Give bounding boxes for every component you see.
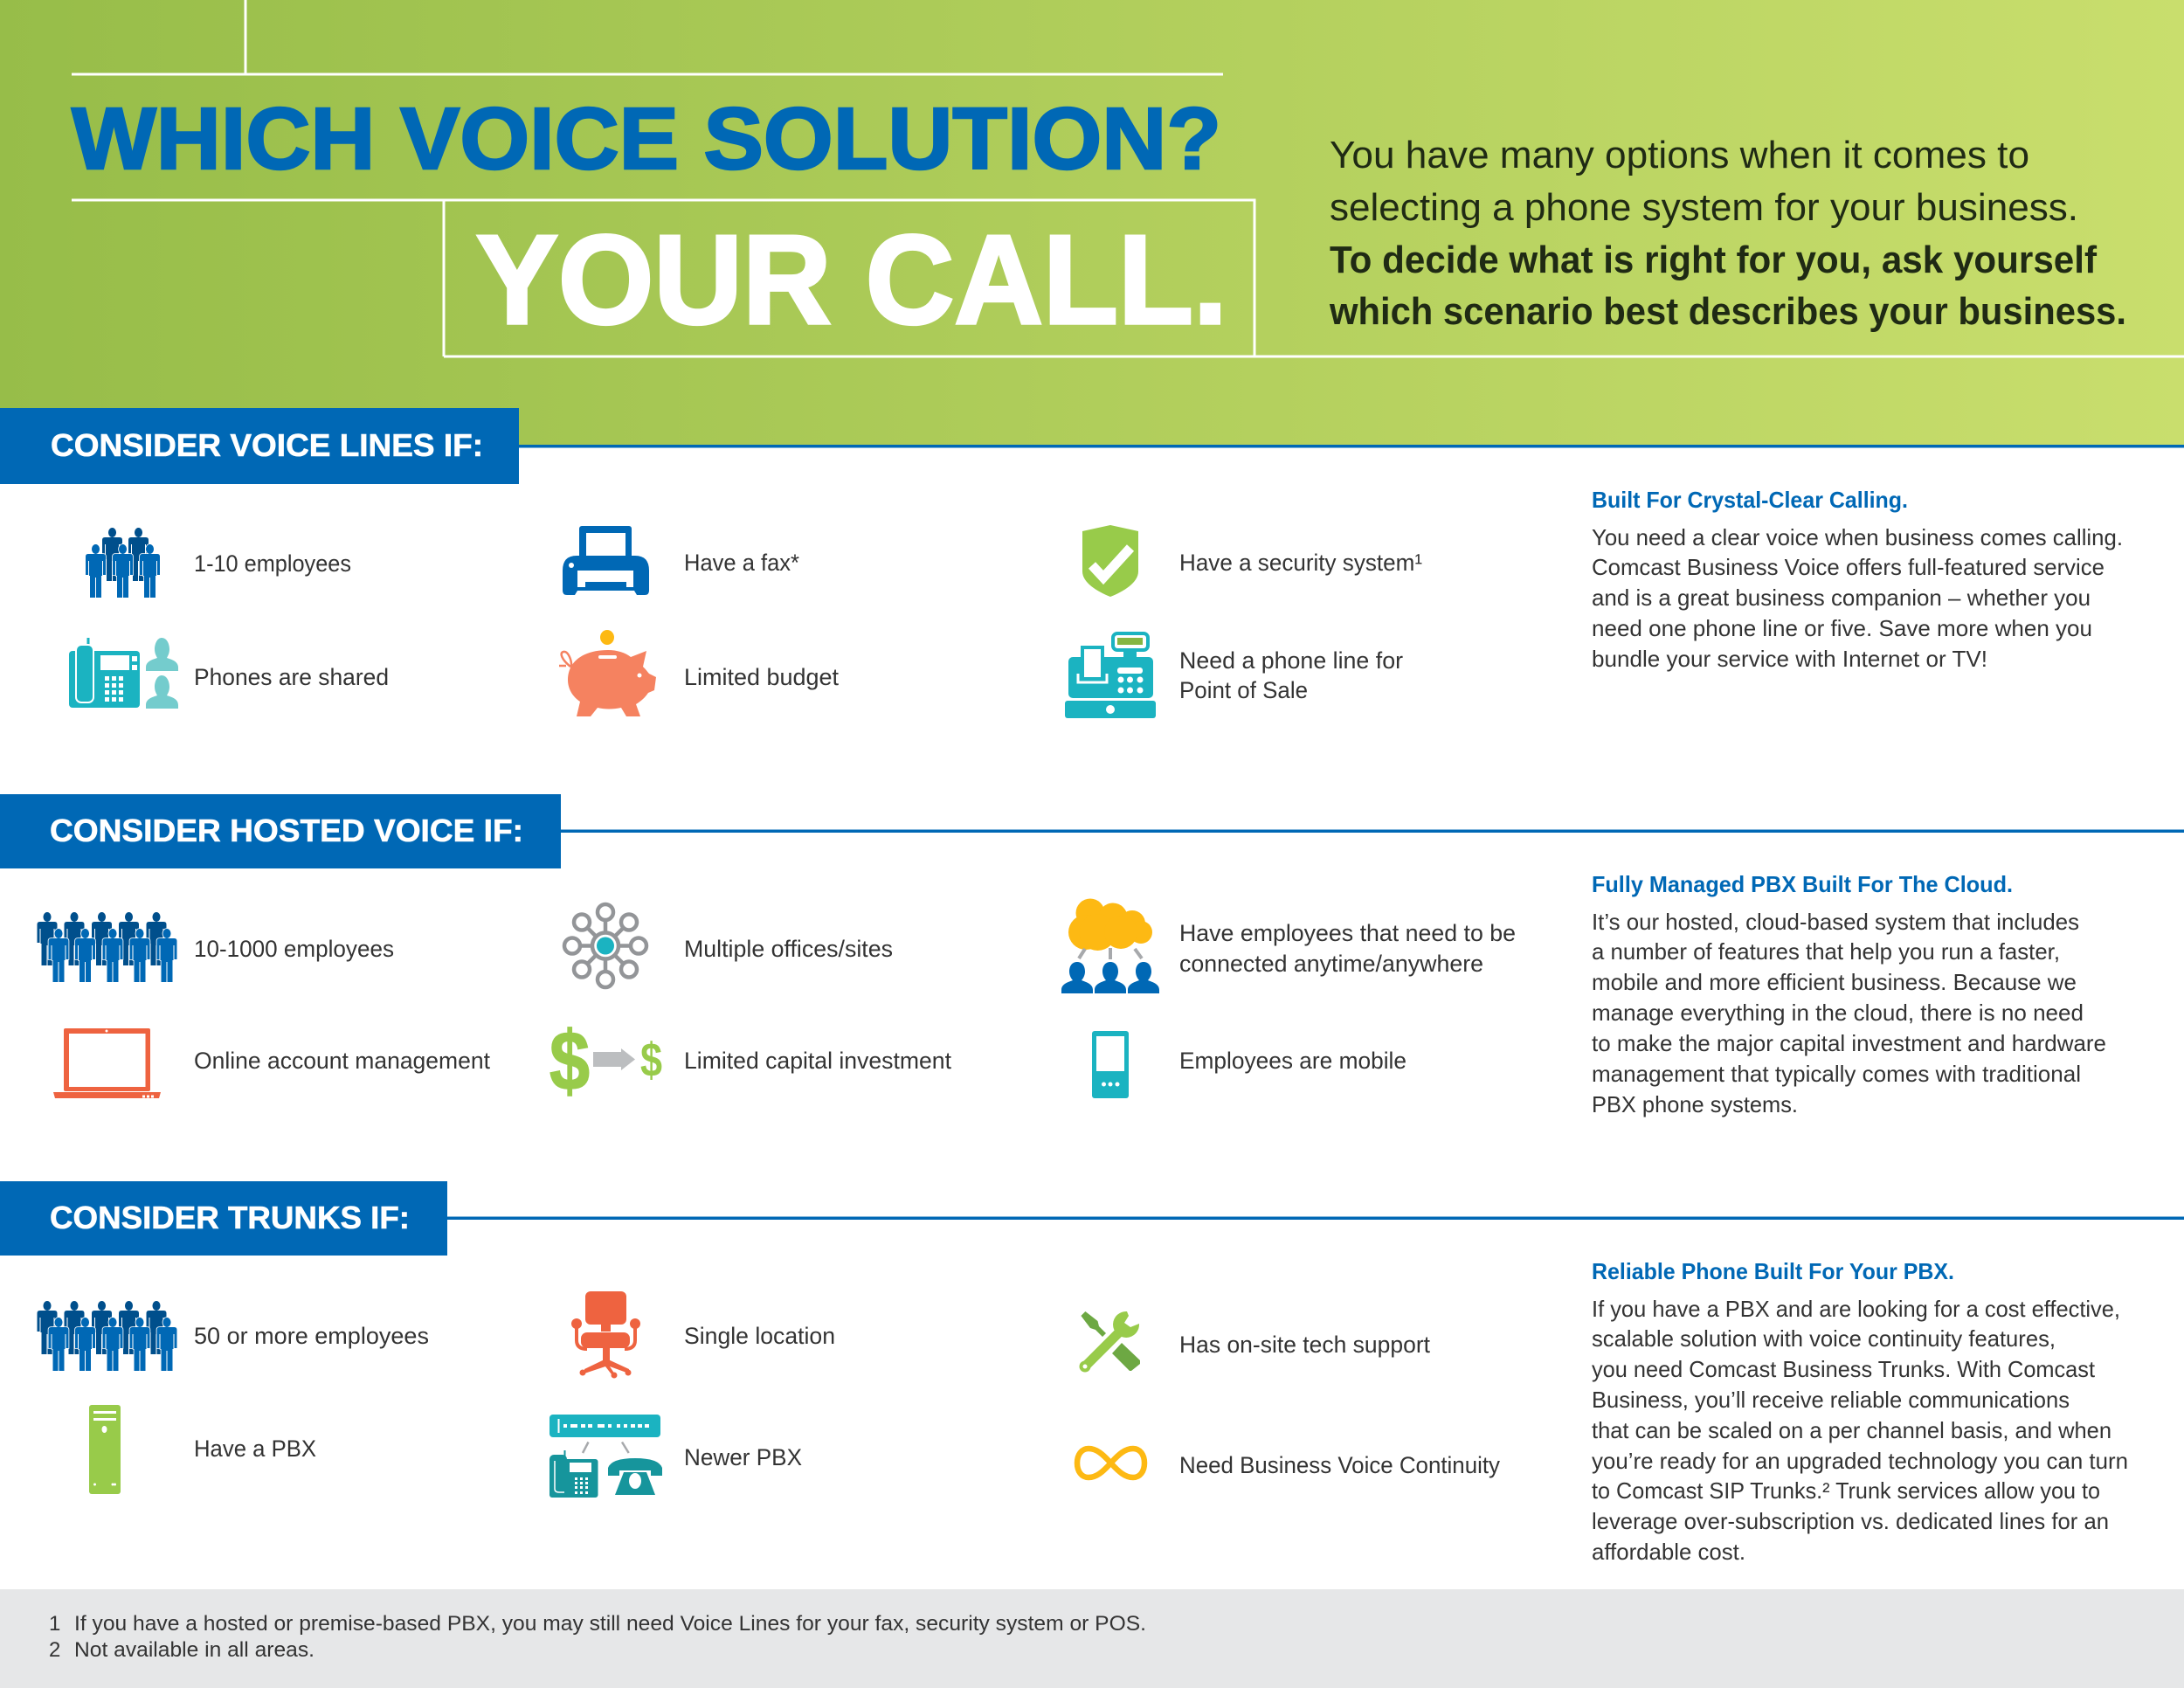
heading: consider voice lines if: CONSIDER VOICE LINES IF: (51, 427, 483, 463)
text: limited budget: Limited budget (684, 664, 839, 690)
heading: built for crystal-clear calling: Built For Crystal-Clear Calling. (1592, 487, 1908, 513)
text: have employees connected: connected anytime/anywhere (1179, 951, 1483, 977)
panel: header (0, 0, 2184, 446)
text: multiple offices/sites: Multiple offices/sites (684, 936, 893, 962)
icon: wrench and screwdriver (1080, 1311, 1140, 1372)
text block: trunks description (1592, 1296, 2128, 1565)
panel: consider trunks (0, 1181, 2184, 1565)
text: need a phone line for point of sale (1179, 647, 1403, 703)
heading: reliable phone: Reliable Phone Built For Your PBX. (1592, 1258, 1954, 1284)
heading: consider hosted voice if: CONSIDER HOSTED VOICE IF: (50, 813, 523, 848)
heading: consider voice lines if (0, 408, 519, 484)
text: 50 or more employees: 50 or more employees (194, 1323, 429, 1349)
icon: cloud and connected employees (1061, 898, 1159, 993)
text block: voice lines description: and is a great business companion – whether you (1592, 585, 2091, 611)
text: 1-10 employees: 1-10 employees (194, 550, 351, 577)
icon: network of offices (564, 904, 646, 987)
title: which voice solution: WHICH VOICE SOLUTION? (72, 90, 1221, 188)
text block: voice lines description: Comcast Business Voice offers full-featured service (1592, 554, 2105, 580)
text: have employees connected (1179, 920, 1516, 977)
text block: hosted voice description: manage everything in the cloud, there is no need (1592, 1000, 2084, 1026)
text block: trunks description: you’re ready for an upgraded technology you can turn (1592, 1448, 2128, 1474)
text block: trunks description: you need Comcast Business Trunks. With Comcast (1592, 1356, 2096, 1382)
icon: pbx server tower (89, 1405, 121, 1494)
icon: newer pbx with phones (549, 1415, 662, 1498)
icon: infinity symbol (1077, 1449, 1144, 1477)
text: have a fax: Have a fax* (684, 550, 799, 576)
text: need a phone line for point of sale: Need a phone line for (1179, 647, 1403, 674)
panel: consider hosted voice (0, 794, 2184, 1117)
text block: trunks description: that can be scaled on a per channel basis, and when (1592, 1417, 2111, 1443)
text block: trunks description: to Comcast SIP Trunks.² Trunk services allow you to (1592, 1477, 2100, 1504)
text: have a pbx: Have a PBX (194, 1435, 316, 1462)
heading: consider hosted voice if (0, 794, 561, 868)
text: have employees connected: Have employees that need to be (1179, 920, 1516, 946)
text: limited capital investment: Limited capital investment (684, 1048, 951, 1074)
heading: consider trunks if (0, 1181, 447, 1256)
intro text: You have many options when it comes to (1330, 134, 2029, 176)
footer: footnotes (0, 1589, 2184, 1688)
text: employees are mobile: Employees are mobile (1179, 1048, 1406, 1074)
icon: large to small dollar: $ (640, 1033, 662, 1087)
text: 10-1000 employees: 10-1000 employees (194, 936, 394, 962)
text block: trunks description: If you have a PBX and are looking for a cost effective, (1592, 1296, 2120, 1322)
icon: shared phone (69, 638, 178, 709)
text block: trunks description: scalable solution with voice continuity features, (1592, 1325, 2056, 1352)
text block: trunks description: Business, you’ll receive reliable communications (1592, 1387, 2070, 1413)
icon: large to small dollar (549, 1014, 662, 1108)
title: your call: YOUR CALL. (476, 209, 1227, 350)
intro text: which scenario best describes your business. (1329, 290, 2126, 333)
text block: hosted voice description (1592, 909, 2106, 1117)
text block: voice lines description: need one phone line or five. Save more when you (1592, 615, 2092, 641)
icon: group of employees small (86, 528, 160, 598)
icon: group of employees large (37, 1301, 176, 1371)
text block: hosted voice description: management that typically comes with traditional (1592, 1061, 2081, 1087)
text block: hosted voice description: mobile and more efficient business. Because we (1592, 969, 2077, 995)
icon: laptop (53, 1028, 161, 1098)
text: newer pbx: Newer PBX (684, 1444, 802, 1470)
text block: voice lines description: You need a clear voice when business comes calling. (1592, 524, 2123, 550)
text block: trunks description: affordable cost. (1592, 1539, 1745, 1565)
intro text: selecting a phone system for your business. (1330, 186, 2078, 229)
footer: footnotes: 2 (49, 1638, 60, 1662)
text block: trunks description: leverage over-subscription vs. dedicated lines for an (1592, 1508, 2109, 1534)
text: has on-site tech support: Has on-site tech support (1179, 1332, 1430, 1358)
footer: footnotes: If you have a hosted or premise-based PBX, you may still need Voice Lines for your fax, security system or POS. (74, 1612, 1146, 1636)
icon: security shield (1082, 525, 1138, 597)
text block: hosted voice description: PBX phone systems. (1592, 1091, 1798, 1117)
intro text: To decide what is right for you, ask yourself (1330, 239, 2097, 281)
text: need a phone line for point of sale: Point of Sale (1179, 677, 1308, 703)
text block: hosted voice description: It’s our hosted, cloud-based system that includes (1592, 909, 2079, 935)
text: single location: Single location (684, 1323, 835, 1349)
text: phones are shared: Phones are shared (194, 664, 389, 690)
text: have a security system: Have a security system¹ (1179, 550, 1422, 576)
text block: voice lines description: bundle your service with Internet or TV! (1592, 646, 1987, 672)
text: online account management: Online account management (194, 1048, 490, 1074)
icon: large to small dollar: $ (549, 1014, 590, 1108)
text block: voice lines description (1592, 524, 2123, 672)
footer: footnotes: Not available in all areas. (74, 1638, 314, 1662)
icon: fax machine (563, 526, 649, 595)
text: need business voice continuity: Need Business Voice Continuity (1179, 1452, 1500, 1478)
icon: office chair (571, 1291, 640, 1379)
text block: hosted voice description: a number of features that help you run a faster, (1592, 938, 2060, 965)
intro text (1329, 134, 2126, 333)
icon: mobile phone (1092, 1031, 1129, 1098)
heading: consider trunks if: CONSIDER TRUNKS IF: (50, 1200, 410, 1235)
icon: group of employees large (37, 912, 176, 982)
text block: hosted voice description: to make the major capital investment and hardware (1592, 1030, 2106, 1056)
heading: fully managed pbx: Fully Managed PBX Built For The Cloud. (1592, 871, 2013, 897)
icon: cash register (1065, 633, 1156, 718)
icon: piggy bank (559, 630, 656, 716)
panel: consider voice lines (0, 408, 2184, 718)
footer: footnotes: 1 (49, 1612, 60, 1636)
